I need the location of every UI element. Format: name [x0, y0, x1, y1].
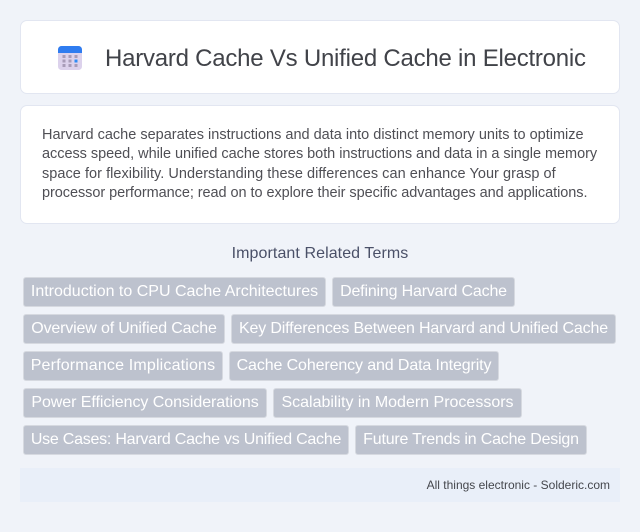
tag: Future Trends in Cache Design — [363, 431, 579, 448]
tag — [355, 425, 587, 455]
tag: Scalability in Modern Processors — [281, 394, 514, 411]
tag — [332, 277, 515, 307]
tag: Defining Harvard Cache — [340, 283, 507, 300]
tag — [231, 314, 616, 344]
tag — [23, 388, 267, 418]
panel: header — [20, 20, 620, 94]
description text: processor performance; read on to explore their specific advantages and applications. — [42, 185, 587, 201]
tag: Use Cases: Harvard Cache vs Unified Cache — [31, 431, 341, 448]
title: Harvard Cache Vs Unified Cache in Electronic — [105, 45, 586, 72]
tag — [273, 388, 522, 418]
description text: Harvard cache separates instructions and data into distinct memory units to optimize — [42, 127, 584, 143]
tag: Power Efficiency Considerations — [31, 394, 259, 411]
tag: Introduction to CPU Cache Architectures — [31, 283, 318, 300]
tag — [23, 314, 225, 344]
tag — [23, 351, 223, 381]
description text: space for flexibility. Understanding these differences can enhance Your grasp of — [42, 166, 556, 182]
tag — [23, 425, 349, 455]
footer text: All things electronic - Solderic.com — [427, 478, 610, 492]
tag: Key Differences Between Harvard and Unified Cache — [239, 320, 608, 337]
tag — [229, 351, 499, 381]
tag — [23, 277, 326, 307]
heading: related terms: Important Related Terms — [232, 245, 408, 262]
description text: access speed, while unified cache stores both instructions and data in a single memory — [42, 146, 597, 162]
footer bar — [20, 468, 620, 502]
icon: calendar — [58, 46, 82, 70]
panel: description — [20, 105, 620, 224]
tag list — [23, 277, 616, 455]
tag: Performance Implications — [31, 357, 215, 374]
tag: Cache Coherency and Data Integrity — [237, 357, 491, 374]
tag: Overview of Unified Cache — [31, 320, 217, 337]
description text — [42, 127, 597, 201]
